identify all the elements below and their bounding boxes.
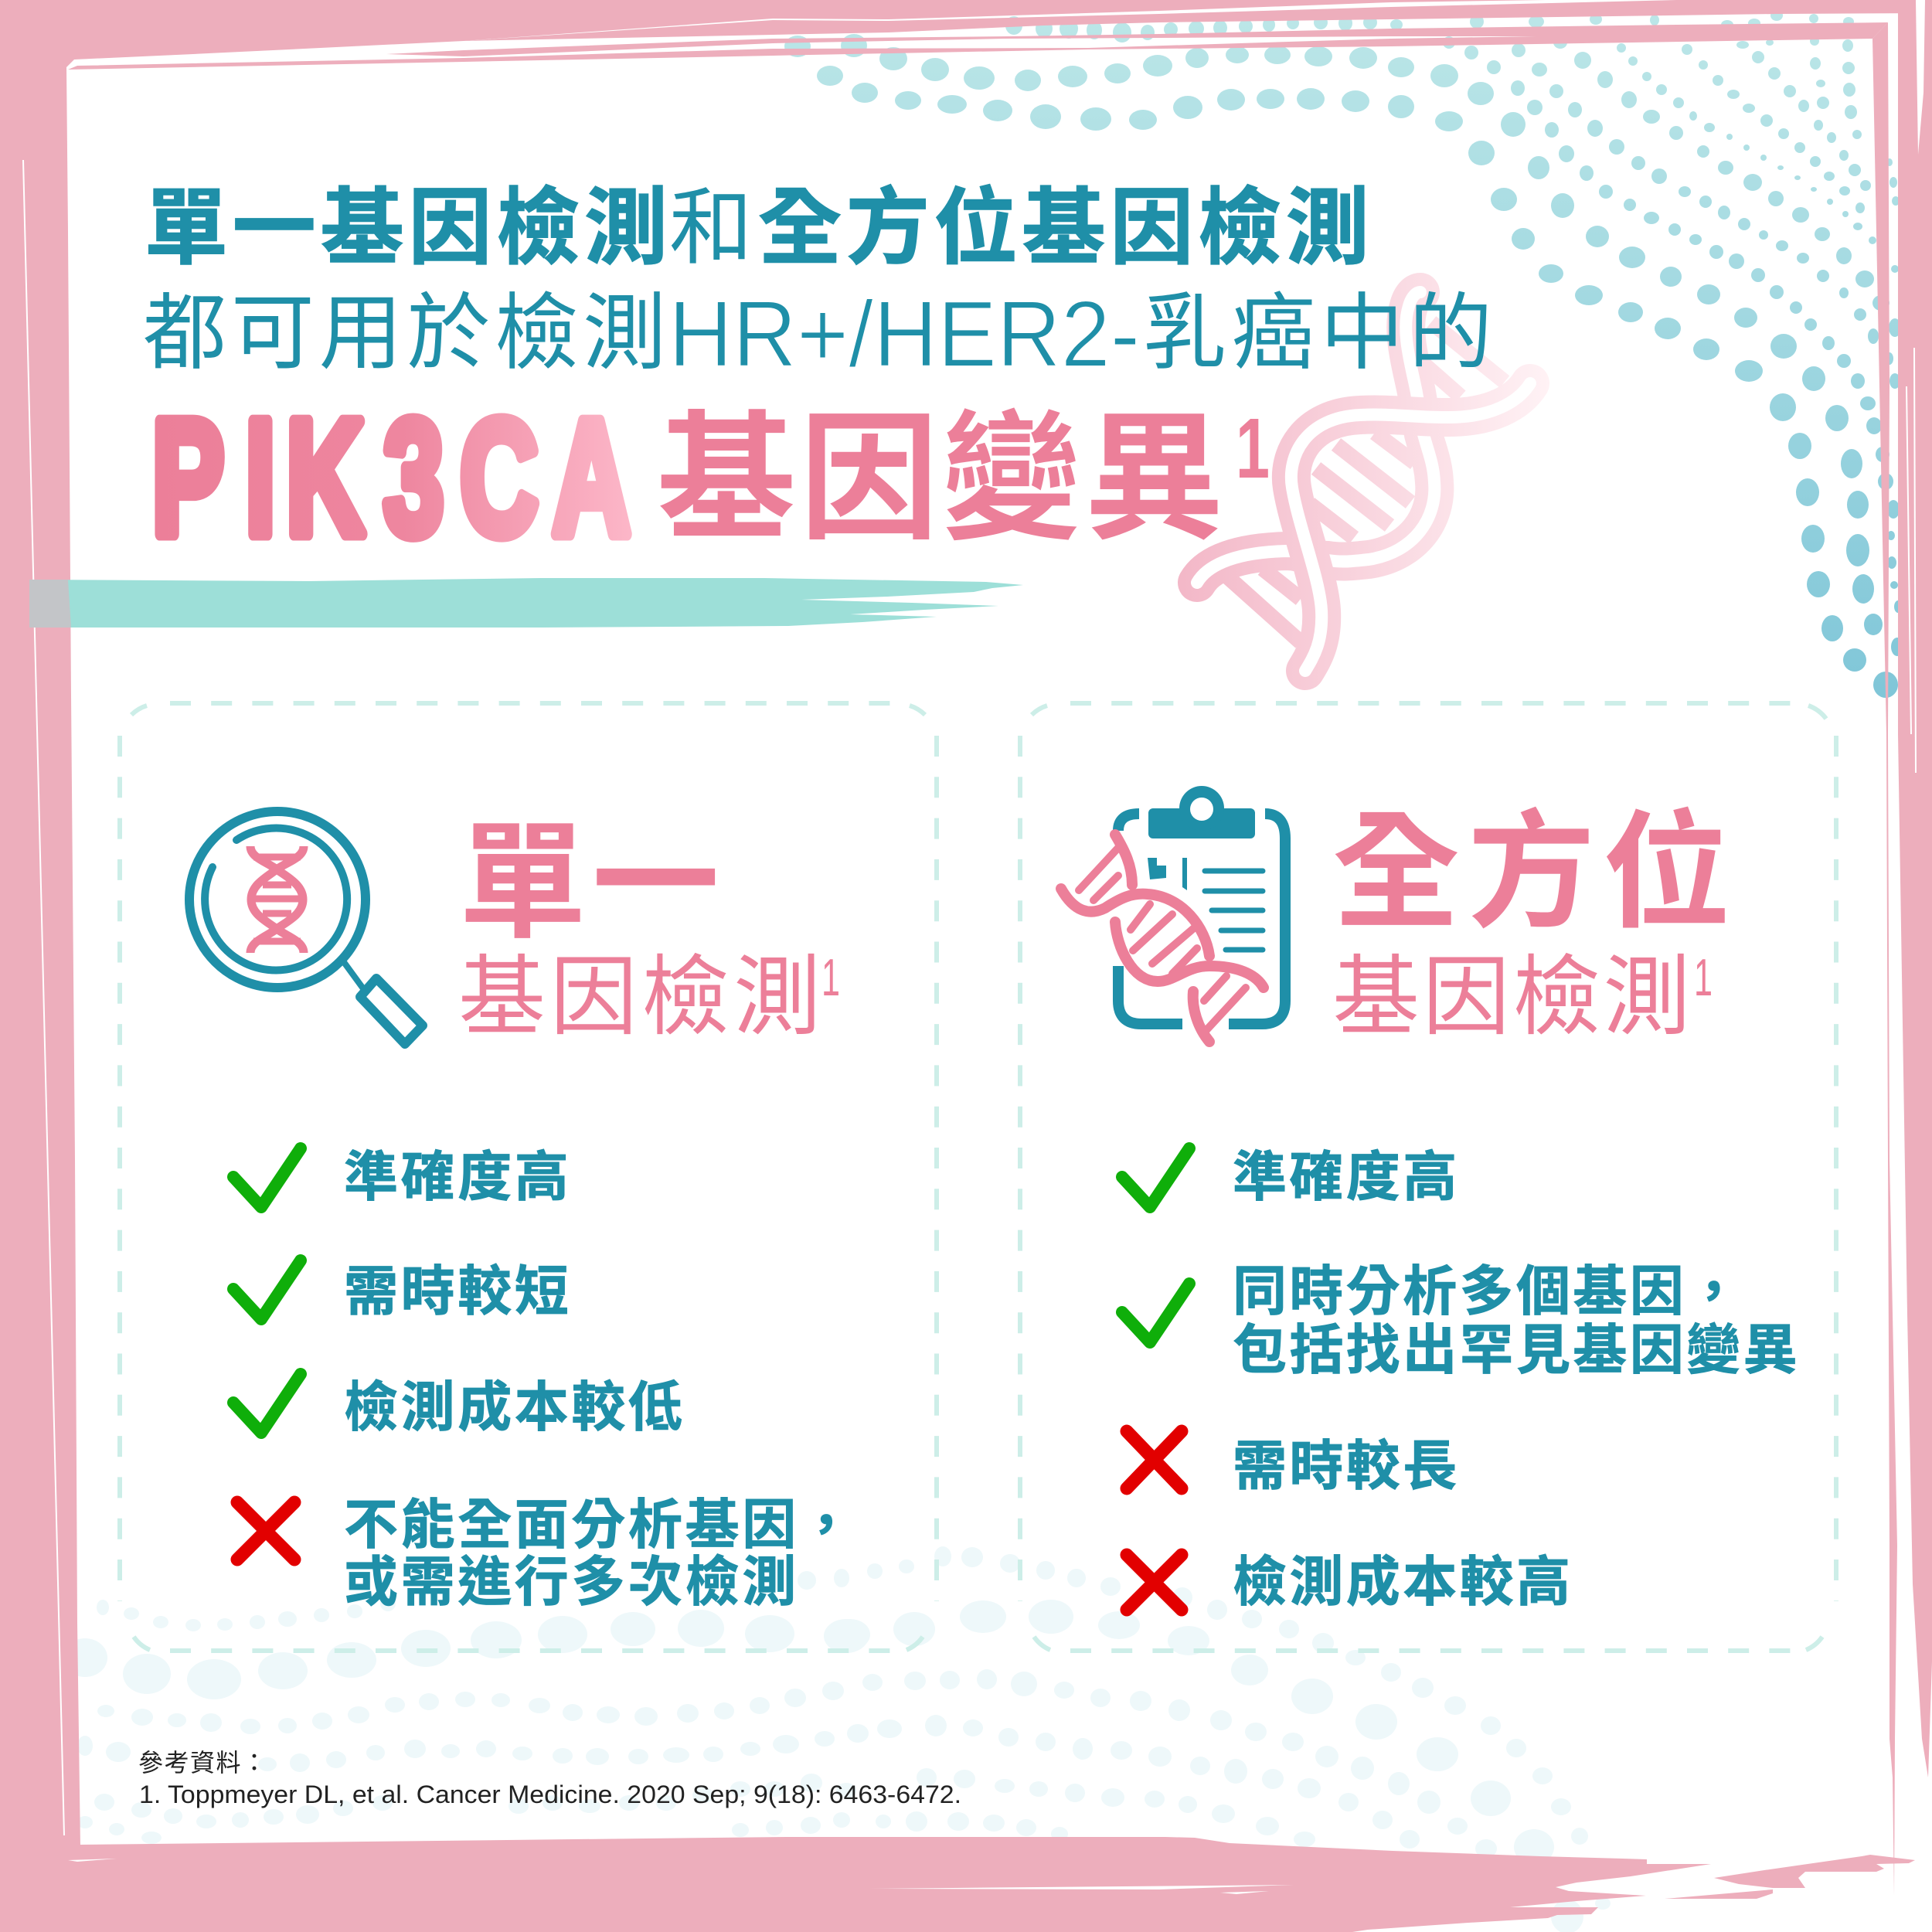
title footnote mark: 1 (1236, 401, 1270, 496)
dashed panel border (120, 703, 937, 1651)
title line 2: 乳癌中的 (1143, 266, 1498, 386)
cross icon (237, 1502, 294, 1560)
list text: 準確度高 (1233, 1134, 1460, 1212)
list text (344, 1134, 855, 1617)
heading: comprehensive: 全方位 (1332, 769, 1738, 954)
reference heading: 參考資料： (138, 1743, 268, 1779)
list text: 需時較長 (1233, 1423, 1460, 1501)
title (143, 161, 1498, 570)
title line 1: 全方位基因檢測 (758, 161, 1374, 281)
title line 3: PIK3CA: PIK3CA (152, 386, 631, 570)
list text: 檢測成本較高 (1233, 1539, 1573, 1617)
subheading: gene test: 基因檢測 (1332, 926, 1693, 1053)
list text (1233, 1134, 1800, 1617)
list: pros and cons (233, 1134, 855, 1617)
list text: 包括找出罕見基因變異 (1233, 1307, 1800, 1385)
icon: clipboard with DNA (1061, 786, 1285, 1042)
dashed panel border (1020, 703, 1836, 1651)
list text: 需時較短 (344, 1248, 571, 1326)
check icons (233, 1148, 301, 1433)
list text: 或需進行多次檢測 (344, 1539, 799, 1617)
teal brush stroke (29, 578, 1023, 628)
title line 1 (145, 161, 1374, 281)
panel: comprehensive gene test (1020, 703, 1836, 1651)
background dot pattern: bottom (pale) (63, 1546, 1611, 1932)
footnote mark: 1 (1694, 948, 1713, 1007)
background dot pattern: top right (784, 10, 1903, 698)
footnote mark: 1 (821, 948, 840, 1007)
subheading: gene test: 基因檢測 (458, 926, 825, 1053)
icon: magnifier with DNA (189, 811, 423, 1044)
list text: 同時分析多個基因， (1233, 1248, 1743, 1326)
list text: 準確度高 (344, 1134, 571, 1212)
references (138, 1743, 961, 1808)
icon: large DNA helix (1197, 292, 1530, 671)
title line 1: 和 (669, 161, 757, 281)
list text: 不能全面分析基因， (344, 1481, 855, 1560)
panel: single gene test (120, 703, 937, 1651)
title line 2 (143, 266, 1498, 386)
list text: 檢測成本較低 (344, 1364, 685, 1442)
title line 2: 都可用於檢測 (143, 266, 671, 386)
title line 2: HR+/HER2- (668, 281, 1140, 386)
list: pros and cons (1122, 1134, 1800, 1617)
title line 3: gene mutation: 基因變異 (657, 366, 1227, 567)
reference text: 1. Toppmeyer DL, et al. Cancer Medicine. 2020 Sep; 9(18): 6463-6472. (139, 1781, 961, 1808)
heading: single: 單一 (459, 779, 725, 964)
title line 1: 單一基因檢測 (145, 161, 672, 281)
cross icons (1127, 1431, 1182, 1610)
check icons (1122, 1148, 1189, 1342)
